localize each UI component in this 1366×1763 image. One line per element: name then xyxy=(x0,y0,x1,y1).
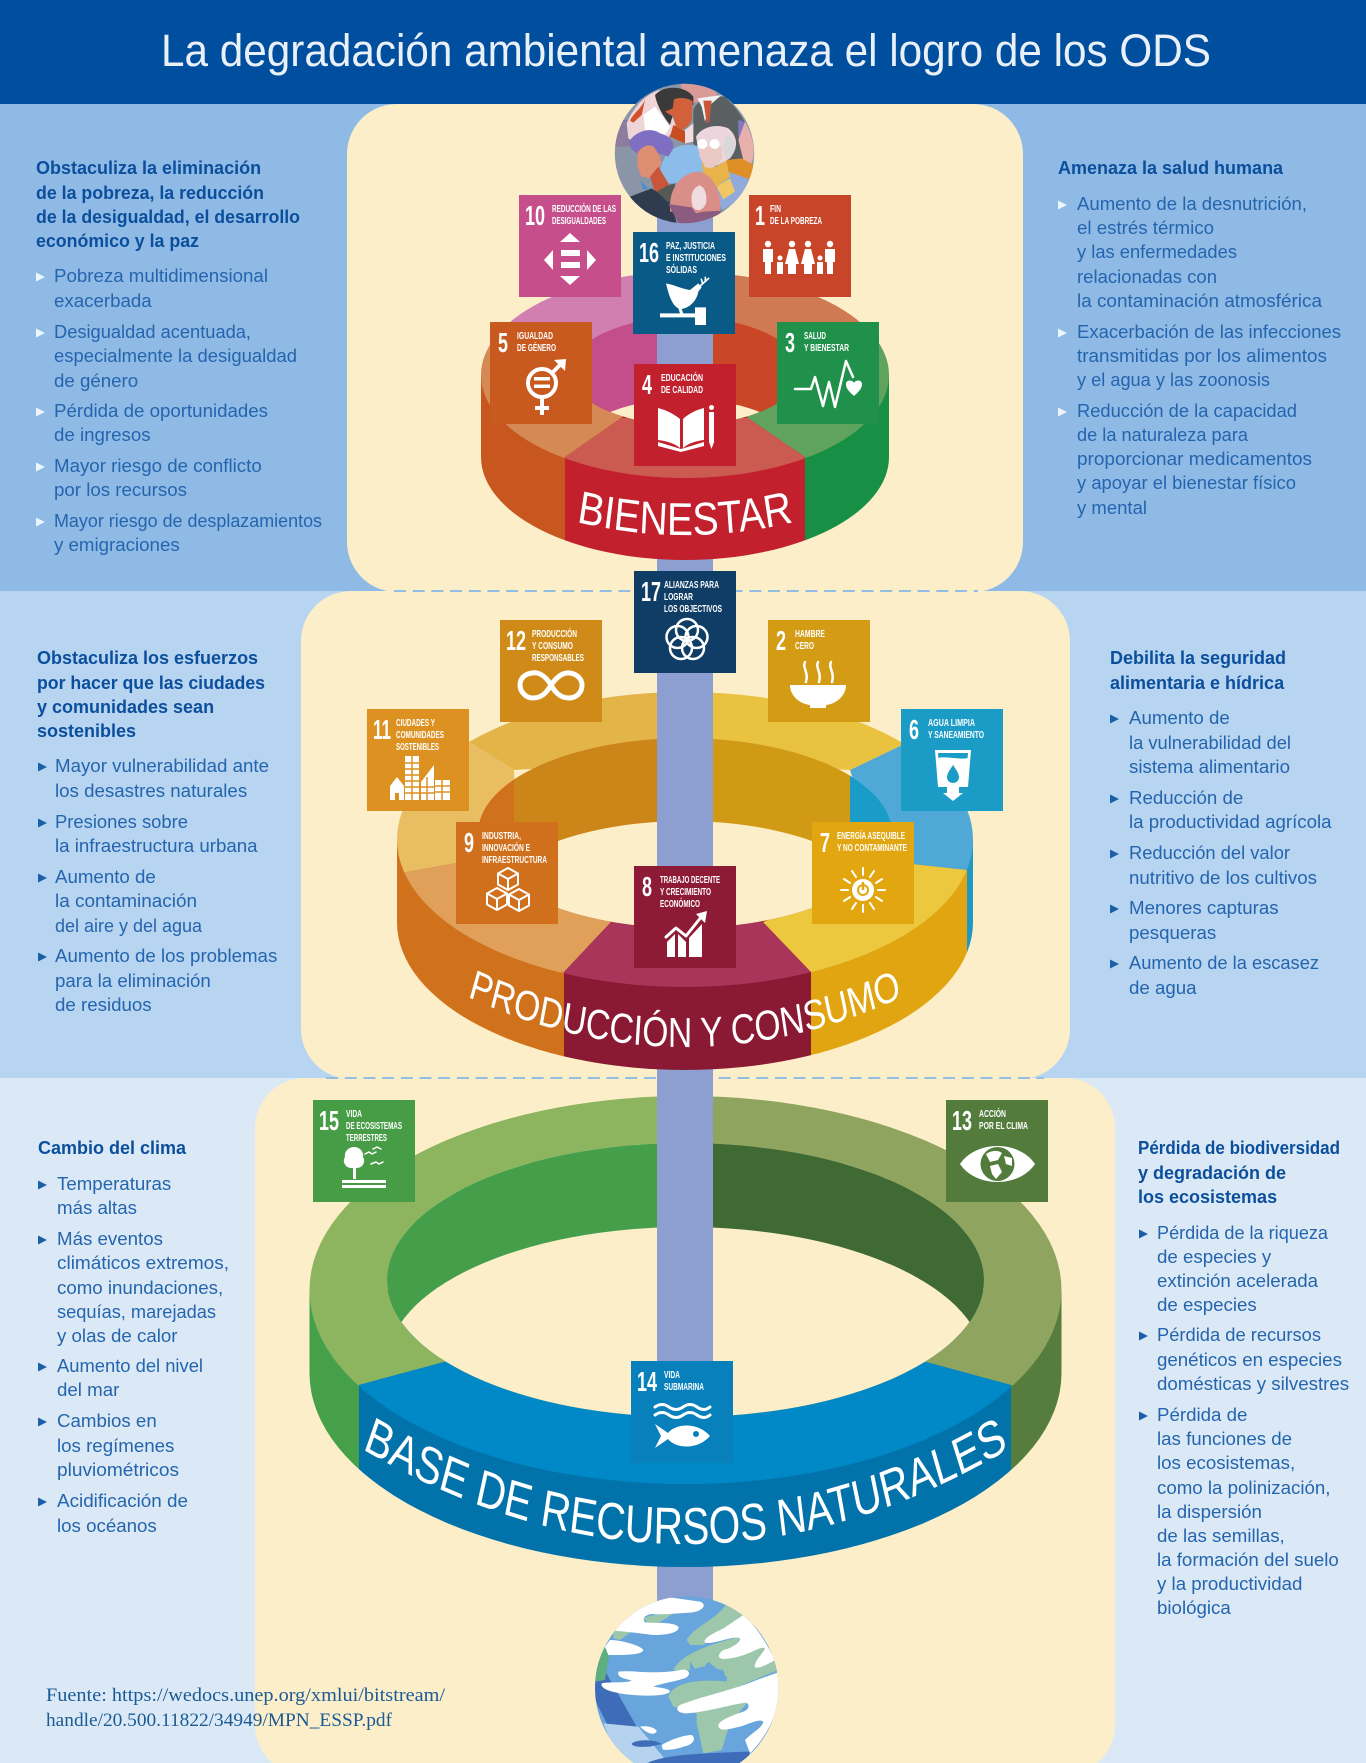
tile 4: educación de calidad: DE CALIDAD xyxy=(661,384,703,396)
background band: producción y consumo xyxy=(0,591,1366,1078)
icon: growth chart xyxy=(667,911,707,957)
item: y olas de calor xyxy=(57,1325,178,1346)
item: sistema alimentario xyxy=(1129,756,1290,777)
tile 8: trabajo decente y crecimiento económico: 8 xyxy=(642,871,652,902)
tile 15: vida de ecosistemas terrestres: VIDA xyxy=(346,1108,362,1120)
tile 9: industria, innovación e infraestructura: 9 xyxy=(464,827,474,858)
icon: gender equality symbol xyxy=(528,362,563,415)
icon: arrows and equals xyxy=(544,233,596,285)
item: especialmente la desigualdad xyxy=(54,345,297,366)
tile 1: fin de la pobreza: FIN xyxy=(770,203,781,215)
tile 11: ciudades y comunidades sostenibles: SOSTENIBLES xyxy=(396,741,439,753)
item: la productividad agrícola xyxy=(1129,811,1332,832)
item: Reducción del valor xyxy=(1129,842,1290,863)
item xyxy=(38,945,277,1015)
icon: interlaced rings xyxy=(666,619,708,659)
item: domésticas y silvestres xyxy=(1157,1373,1349,1394)
tile 7: energía asequible y no contaminante: ENERGÍA ASEQUIBLE xyxy=(837,829,905,842)
tile 8: trabajo decente y crecimiento económico: ECONÓMICO xyxy=(660,897,700,910)
tile 2: hambre cero: CERO xyxy=(795,640,814,652)
list: salud humana xyxy=(1058,193,1341,518)
item: Aumento de la escasez xyxy=(1129,952,1319,973)
tile 10: reducción de las desigualdades: REDUCCIÓN DE LAS xyxy=(552,202,616,215)
tile 10: reducción de las desigualdades: 10 xyxy=(525,200,545,231)
icon: waves and fish xyxy=(655,1404,710,1418)
ring: producción y consumo xyxy=(397,692,973,1070)
heading: pobreza y desigualdad: de la desigualdad, el desarrollo xyxy=(36,207,300,227)
item: de ingresos xyxy=(54,424,151,445)
tile 9: industria, innovación e infraestructura xyxy=(456,822,558,924)
icon: book and pencil xyxy=(658,405,714,452)
tile 17: alianzas para lograr los objetivos xyxy=(634,571,736,673)
item: y el agua y las zoonosis xyxy=(1077,369,1270,390)
tile 12: producción y consumo responsables: 12 xyxy=(506,625,526,656)
icon: tree, birds and land xyxy=(342,1147,386,1188)
tile 13: acción por el clima: 13 xyxy=(952,1105,972,1136)
tile 9: industria, innovación e infraestructura: INNOVACIÓN E xyxy=(482,841,530,854)
tile 9: industria, innovación e infraestructura: INDUSTRIA, xyxy=(482,830,521,842)
illustration: globe xyxy=(590,1593,785,1763)
icon: cubes xyxy=(487,868,529,911)
tile 17: alianzas para lograr los objetivos: LOGRAR xyxy=(664,591,693,603)
item: los ecosistemas, xyxy=(1157,1452,1295,1473)
item xyxy=(38,1410,179,1480)
item xyxy=(38,1490,188,1536)
icon: bowl xyxy=(790,685,846,708)
item: Mayor riesgo de conflicto xyxy=(54,455,262,476)
tile 10: reducción de las desigualdades: DESIGUALDADES xyxy=(552,215,606,227)
item: la contaminación xyxy=(55,890,197,911)
item: nutritivo de los cultivos xyxy=(1129,867,1317,888)
title: La degradación ambiental amenaza el logro de los ODS xyxy=(161,25,1211,76)
heading: seguridad alimentaria: Debilita la seguridad xyxy=(1110,648,1286,668)
item xyxy=(38,866,203,936)
heading: salud humana: Amenaza la salud humana xyxy=(1058,158,1284,178)
tile 1: fin de la pobreza xyxy=(749,195,851,297)
item: de género xyxy=(54,370,138,391)
item: sequías, marejadas xyxy=(57,1301,216,1322)
ring: base de recursos naturales xyxy=(300,1090,1070,1580)
tile 11: ciudades y comunidades sostenibles: 11 xyxy=(373,714,391,745)
item: y las enfermedades xyxy=(1077,241,1237,262)
item: los desastres naturales xyxy=(55,780,247,801)
tile 4: educación de calidad: EDUCACIÓN xyxy=(661,371,703,384)
item: Desigualdad acentuada, xyxy=(54,321,251,342)
tile 1: fin de la pobreza: 1 xyxy=(755,200,765,231)
item xyxy=(1058,321,1341,390)
heading: seguridad alimentaria: alimentaria e hídrica xyxy=(1110,673,1285,693)
panel: cream producción y consumo xyxy=(301,591,1070,1079)
central column xyxy=(657,150,713,1620)
tile 6: agua limpia y saneamiento: AGUA LIMPIA xyxy=(928,717,975,729)
item: Acidificación de xyxy=(57,1490,188,1511)
list: cambio del clima xyxy=(38,1173,229,1536)
item: transmitidas por los alimentos xyxy=(1077,345,1327,366)
item xyxy=(38,755,269,801)
tile 11: ciudades y comunidades sostenibles: COMUNIDADES xyxy=(396,729,444,741)
item xyxy=(36,510,322,555)
heading: ciudades sostenibles: y comunidades sean xyxy=(37,697,214,717)
tile 3: salud y bienestar: SALUD xyxy=(804,330,826,342)
tile 2: hambre cero: 2 xyxy=(776,625,786,656)
source note: Fuente: https://wedocs.unep.org/xmlui/bitstream/ xyxy=(46,1686,446,1706)
tile 6: agua limpia y saneamiento xyxy=(901,709,1003,811)
item xyxy=(1110,952,1319,998)
tile 14: vida submarina: SUBMARINA xyxy=(664,1381,704,1393)
item xyxy=(1139,1324,1349,1394)
tile 12: producción y consumo responsables: RESPONSABLES xyxy=(532,652,584,664)
tile 7: energía asequible y no contaminante: 7 xyxy=(820,827,830,858)
item xyxy=(36,455,262,500)
tile 4: educación de calidad xyxy=(634,364,736,466)
ring: bienestar xyxy=(481,275,889,560)
tile 16: paz, justicia e instituciones sólidas: PAZ, JUSTICIA xyxy=(666,240,715,252)
tile 7: energía asequible y no contaminante: Y NO CONTAMINANTE xyxy=(837,842,907,854)
icon: infinity loop xyxy=(520,673,582,698)
item: de especies y xyxy=(1157,1246,1272,1267)
item xyxy=(38,1173,171,1218)
tile 7: energía asequible y no contaminante xyxy=(812,822,914,924)
item: de residuos xyxy=(55,994,152,1015)
item: de la naturaleza para xyxy=(1077,424,1249,445)
item: Aumento del nivel xyxy=(57,1355,203,1376)
tile 9: industria, innovación e infraestructura: INFRAESTRUCTURA xyxy=(482,854,547,866)
tile 14: vida submarina xyxy=(631,1361,733,1463)
illustration: people circle xyxy=(614,84,754,224)
item xyxy=(38,1228,229,1346)
tile 4: educación de calidad: 4 xyxy=(642,369,652,400)
item: Presiones sobre xyxy=(55,811,188,832)
tile 6: agua limpia y saneamiento: 6 xyxy=(909,714,919,745)
tile 17: alianzas para lograr los objetivos: ALIANZAS PARA xyxy=(664,579,719,591)
item: el estrés térmico xyxy=(1077,217,1214,238)
tile 13: acción por el clima: POR EL CLIMA xyxy=(979,1120,1028,1132)
tile 8: trabajo decente y crecimiento económico: Y CRECIMIENTO xyxy=(660,886,711,898)
item: Pérdida de recursos xyxy=(1157,1324,1321,1345)
heading: biodiversidad: y degradación de xyxy=(1138,1163,1286,1183)
panel: cream recursos naturales xyxy=(255,1078,1115,1763)
tile 2: hambre cero: HAMBRE xyxy=(795,628,825,640)
item: los océanos xyxy=(57,1515,157,1536)
tile 14: vida submarina: VIDA xyxy=(664,1369,680,1381)
item: de especies xyxy=(1157,1294,1257,1315)
item: extinción acelerada xyxy=(1157,1270,1319,1291)
item: las funciones de xyxy=(1157,1428,1292,1449)
item xyxy=(1110,897,1279,943)
icon: city xyxy=(390,756,450,800)
column segments in front of rings xyxy=(657,223,713,1380)
tile 16: paz, justicia e instituciones sólidas: 16 xyxy=(639,237,659,268)
tile 16: paz, justicia e instituciones sólidas xyxy=(633,232,735,334)
item: exacerbada xyxy=(54,290,152,311)
item: Aumento de la desnutrición, xyxy=(1077,193,1307,214)
item: de las semillas, xyxy=(1157,1525,1285,1546)
item: la infraestructura urbana xyxy=(55,835,258,856)
item xyxy=(1139,1404,1339,1618)
icon: sun with power symbol xyxy=(852,879,874,901)
item: pesqueras xyxy=(1129,922,1216,943)
heading: ciudades sostenibles: Obstaculiza los esfuerzos xyxy=(37,648,258,668)
item: para la eliminación xyxy=(55,970,211,991)
item: Menores capturas xyxy=(1129,897,1279,918)
tile 5: igualdad de género: IGUALDAD xyxy=(517,330,553,342)
tile 6: agua limpia y saneamiento: Y SANEAMIENTO xyxy=(928,729,984,741)
tile 13: acción por el clima: ACCIÓN xyxy=(979,1107,1006,1120)
item: por los recursos xyxy=(54,479,187,500)
item xyxy=(1110,707,1291,777)
item xyxy=(38,1355,203,1400)
item: Reducción de la capacidad xyxy=(1077,400,1297,421)
item: más altas xyxy=(57,1197,137,1218)
item: del mar xyxy=(57,1379,119,1400)
item: Mayor vulnerabilidad ante xyxy=(55,755,269,776)
item xyxy=(36,321,297,391)
item: proporcionar medicamentos xyxy=(1077,448,1312,469)
item: la vulnerabilidad del xyxy=(1129,732,1291,753)
tile 12: producción y consumo responsables: PRODUCCIÓN xyxy=(532,627,577,640)
tile 5: igualdad de género xyxy=(490,322,592,424)
item xyxy=(36,400,268,445)
heading: biodiversidad: los ecosistemas xyxy=(1138,1187,1277,1207)
tile 2: hambre cero xyxy=(768,620,870,722)
heading: pobreza y desigualdad: económico y la paz xyxy=(36,231,199,251)
icon: water glass and drop xyxy=(935,750,971,801)
ring label: producción y consumo: PRODUCCIÓN Y CONSUMO xyxy=(470,970,898,1048)
tile 14: vida submarina: 14 xyxy=(637,1366,657,1397)
ring label: base de recursos naturales: BASE DE RECURSOS NATURALES xyxy=(365,1418,1005,1544)
ring label: bienestar: BIENESTAR xyxy=(580,492,792,536)
item: Exacerbación de las infecciones xyxy=(1077,321,1341,342)
tile 11: ciudades y comunidades sostenibles: CIUDADES Y xyxy=(396,717,435,729)
heading: pobreza y desigualdad: de la pobreza, la reducción xyxy=(36,183,264,203)
item: Pérdida de xyxy=(1157,1404,1247,1425)
item: de agua xyxy=(1129,977,1197,998)
tile 5: igualdad de género: 5 xyxy=(498,327,508,358)
item xyxy=(38,811,258,856)
list: biodiversidad xyxy=(1139,1222,1349,1618)
item xyxy=(1110,787,1332,832)
item: y apoyar el bienestar físico xyxy=(1077,472,1296,493)
tile 16: paz, justicia e instituciones sólidas: SÓLIDAS xyxy=(666,263,697,276)
tile 12: producción y consumo responsables: Y CONSUMO xyxy=(532,640,573,652)
tile 10: reducción de las desigualdades xyxy=(519,195,621,297)
heading: cambio del clima: Cambio del clima xyxy=(38,1138,187,1158)
tile 13: acción por el clima xyxy=(946,1100,1048,1202)
heading: ciudades sostenibles: sostenibles xyxy=(37,721,136,741)
item: Reducción de xyxy=(1129,787,1243,808)
item: y la productividad xyxy=(1157,1573,1302,1594)
heading: biodiversidad: Pérdida de biodiversidad xyxy=(1138,1138,1340,1158)
tile 17: alianzas para lograr los objetivos: 17 xyxy=(641,576,661,607)
tile 16: paz, justicia e instituciones sólidas: E INSTITUCIONES xyxy=(666,252,726,264)
tile 8: trabajo decente y crecimiento económico xyxy=(634,866,736,968)
tile 12: producción y consumo responsables xyxy=(500,620,602,722)
tile 3: salud y bienestar: Y BIENESTAR xyxy=(804,342,849,354)
tile 11: ciudades y comunidades sostenibles xyxy=(367,709,469,811)
tile 3: salud y bienestar xyxy=(777,322,879,424)
list: seguridad alimentaria xyxy=(1110,707,1332,998)
item: Aumento de xyxy=(1129,707,1230,728)
item: Pérdida de la riqueza xyxy=(1157,1222,1329,1243)
item: biológica xyxy=(1157,1597,1231,1618)
source note: handle/20.500.11822/34949/MPN_ESSP.pdf xyxy=(46,1711,393,1731)
list: pobreza y desigualdad xyxy=(36,265,322,555)
item xyxy=(1058,193,1323,311)
item: Pobreza multidimensional xyxy=(54,265,268,286)
tile 15: vida de ecosistemas terrestres: TERRESTRES xyxy=(346,1132,387,1144)
tile 8: trabajo decente y crecimiento económico: TRABAJO DECENTE xyxy=(660,874,720,886)
tile 1: fin de la pobreza: DE LA POBREZA xyxy=(770,215,822,227)
tile 15: vida de ecosistemas terrestres xyxy=(313,1100,415,1202)
list: ciudades sostenibles xyxy=(38,755,277,1015)
tile 15: vida de ecosistemas terrestres: DE ECOSISTEMAS xyxy=(346,1120,402,1132)
heading: pobreza y desigualdad: Obstaculiza la eliminación xyxy=(36,158,261,178)
item: genéticos en especies xyxy=(1157,1349,1342,1370)
item xyxy=(1058,400,1312,518)
item xyxy=(1110,842,1317,888)
item: Temperaturas xyxy=(57,1173,171,1194)
item: como inundaciones, xyxy=(57,1277,223,1298)
item: climáticos extremos, xyxy=(57,1252,229,1273)
item: relacionadas con xyxy=(1077,266,1217,287)
panel: cream bienestar xyxy=(347,104,1023,592)
item: y mental xyxy=(1077,497,1147,518)
icon: dove and gavel xyxy=(660,277,709,325)
item: la formación del suelo xyxy=(1157,1549,1339,1570)
tile 17: alianzas para lograr los objetivos: LOS OBJECTIVOS xyxy=(664,603,722,615)
background band: bienestar xyxy=(0,104,1366,591)
icon: family xyxy=(763,241,835,274)
icon: eye with globe xyxy=(960,1146,1035,1182)
item: la contaminación atmosférica xyxy=(1077,290,1323,311)
item: y emigraciones xyxy=(54,534,180,555)
item xyxy=(1139,1222,1329,1315)
tile 5: igualdad de género: DE GÉNERO xyxy=(517,341,556,354)
item: Más eventos xyxy=(57,1228,163,1249)
background band: base de recursos naturales xyxy=(0,1078,1366,1763)
item: Aumento de xyxy=(55,866,156,887)
item: Cambios en xyxy=(57,1410,157,1431)
item: como la polinización, xyxy=(1157,1477,1330,1498)
item: Aumento de los problemas xyxy=(55,945,277,966)
item: Pérdida de oportunidades xyxy=(54,400,268,421)
item: Mayor riesgo de desplazamientos xyxy=(54,510,322,531)
icon: heartbeat xyxy=(795,361,853,407)
heading: ciudades sostenibles: por hacer que las ciudades xyxy=(37,673,265,693)
header bar xyxy=(0,0,1366,104)
tile 15: vida de ecosistemas terrestres: 15 xyxy=(319,1105,339,1136)
item: del aire y del agua xyxy=(55,915,203,936)
tile 3: salud y bienestar: 3 xyxy=(785,327,795,358)
item: la dispersión xyxy=(1157,1501,1262,1522)
item: pluviométricos xyxy=(57,1459,179,1480)
item: los regímenes xyxy=(57,1435,174,1456)
item xyxy=(36,265,268,311)
